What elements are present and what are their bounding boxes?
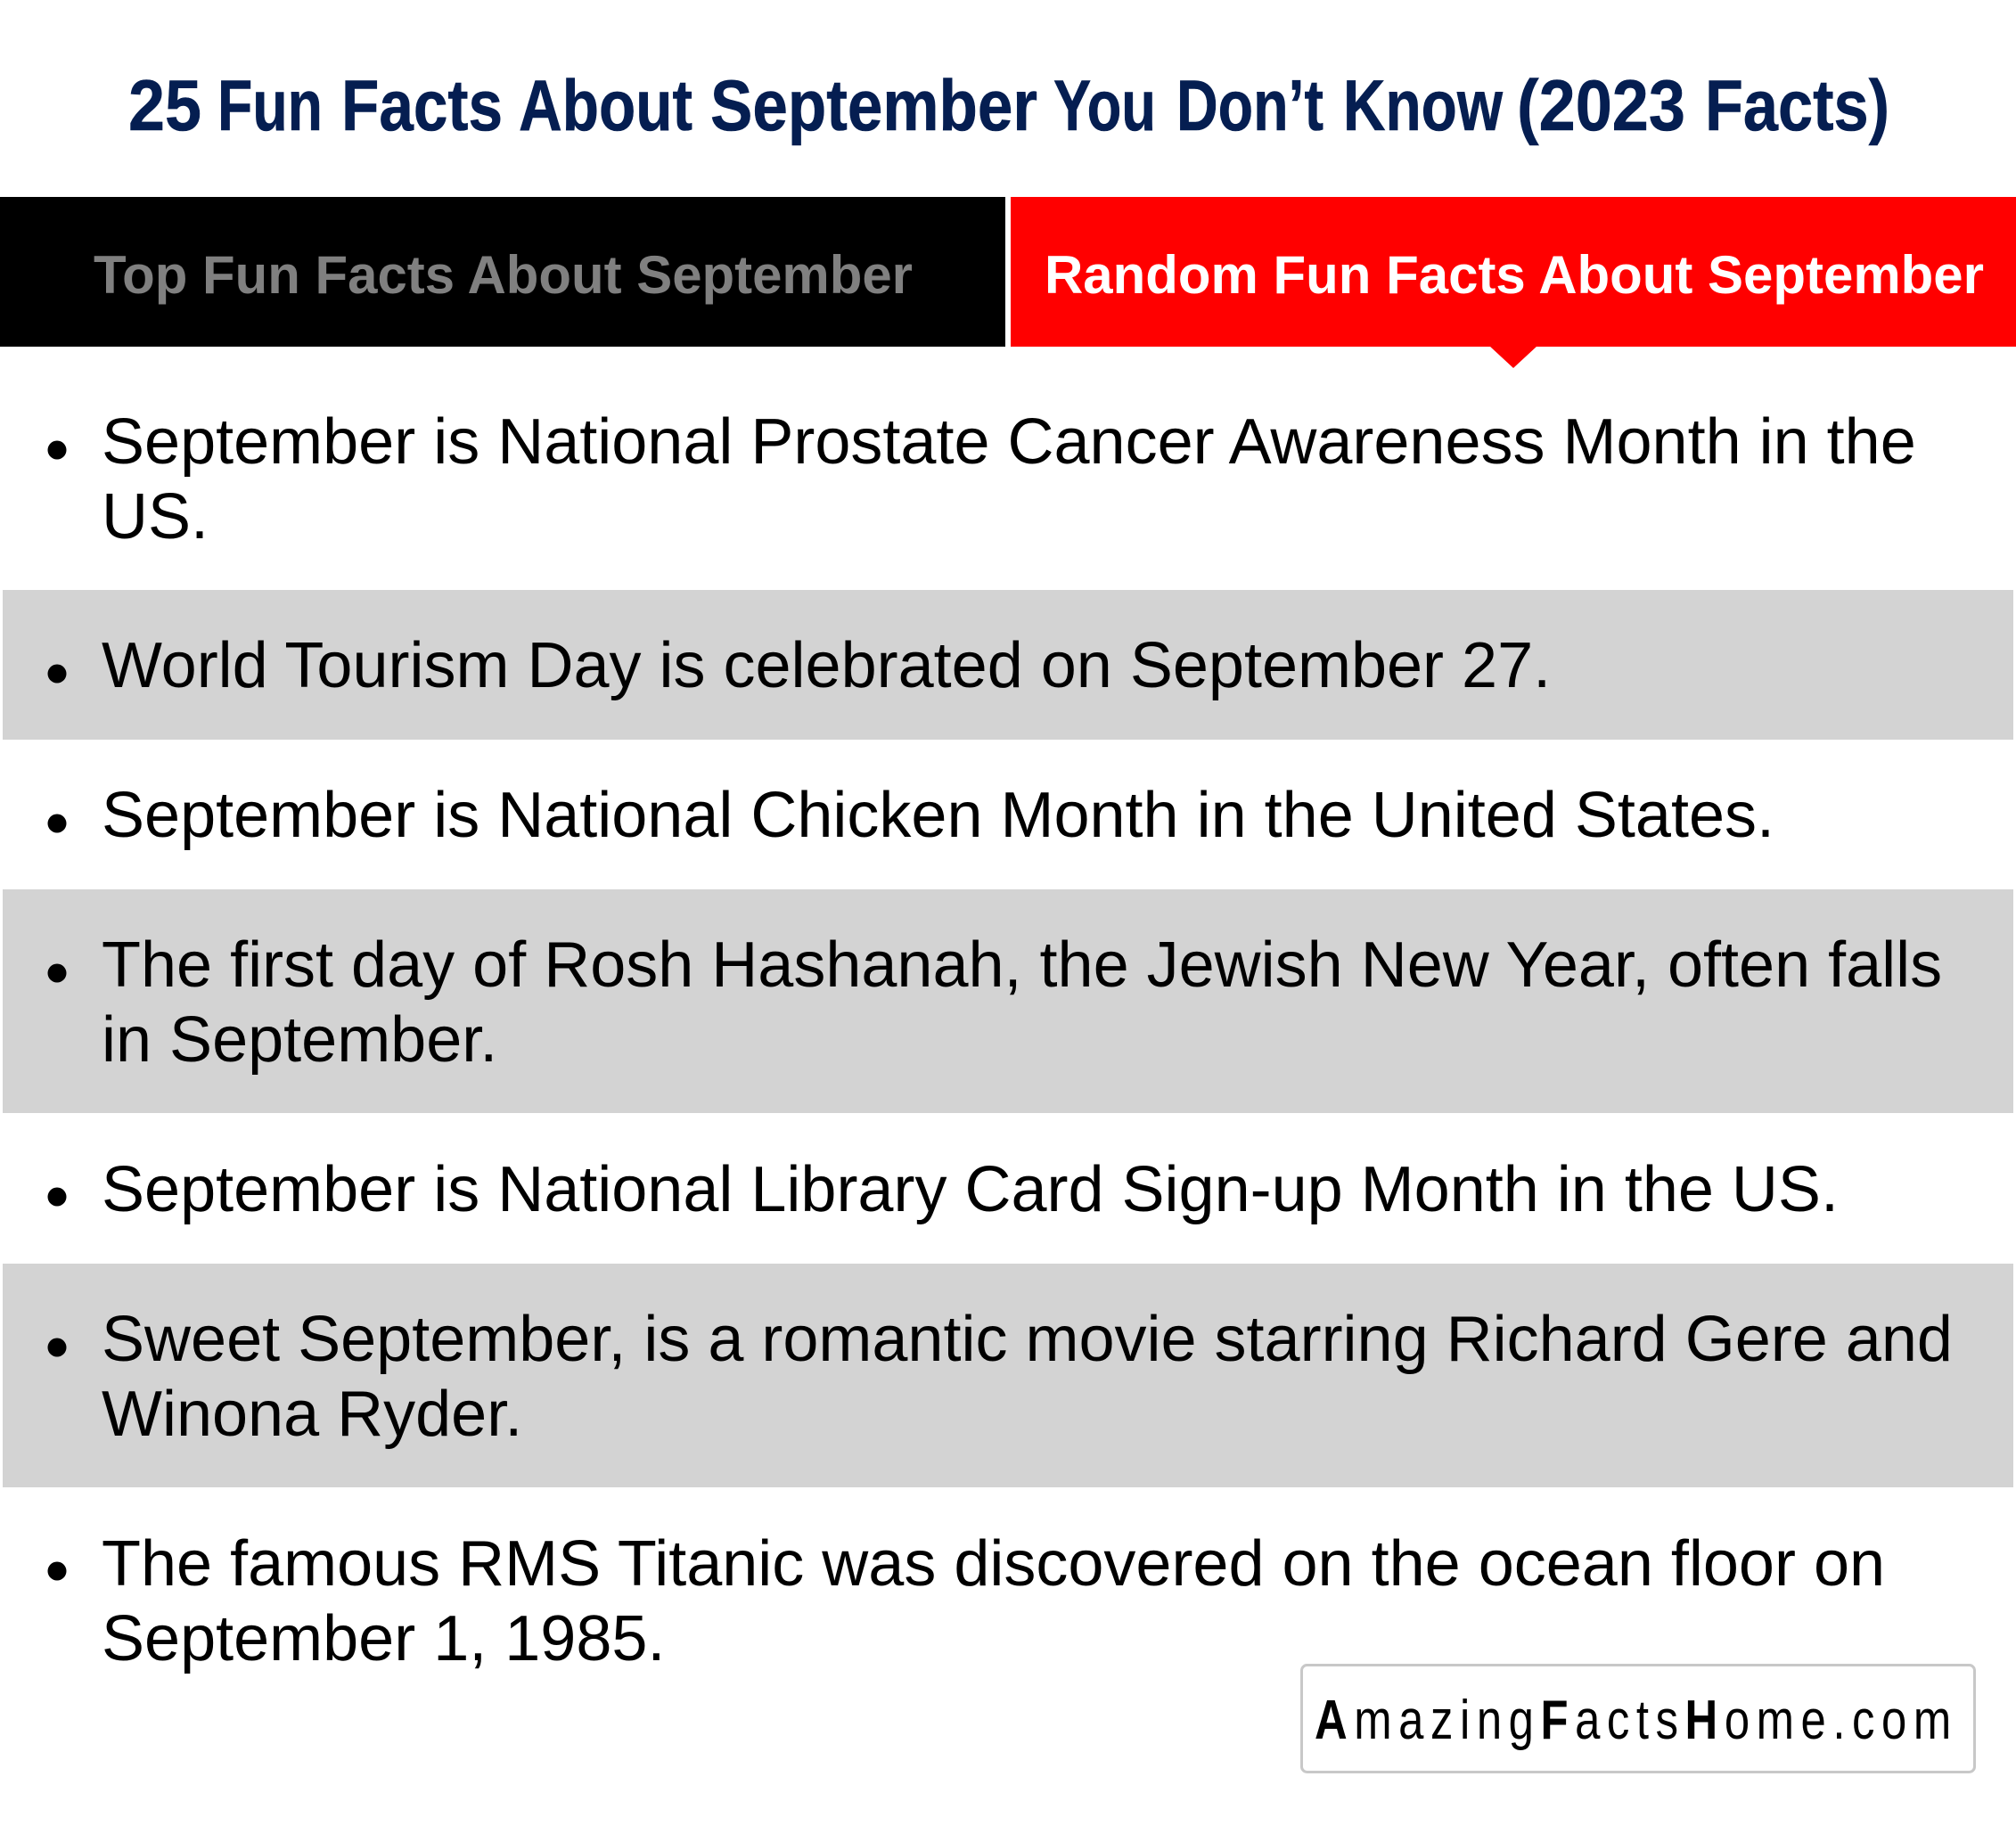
tab: random fun facts (active)	[1011, 197, 2016, 368]
title: 25	[128, 66, 201, 146]
fact 1: US.	[102, 481, 209, 553]
title: (2023	[1517, 66, 1685, 146]
tab: top fun facts	[0, 197, 1005, 347]
tab: random fun facts (active): Random Fun Facts About September	[1045, 245, 1984, 305]
title: Facts)	[1705, 66, 1889, 146]
title: Know	[1343, 66, 1504, 146]
watermark: AmazingFactsHome.com	[1301, 1665, 1975, 1772]
fact 1	[48, 406, 1916, 553]
title: Fun	[217, 66, 323, 146]
tab: top fun facts: Top Fun Facts About September	[94, 245, 913, 305]
title: About	[519, 66, 692, 146]
fact 4: The first day of Rosh Hashanah, the Jewish New Year, often falls	[102, 929, 1942, 1001]
fact 7: September 1, 1985.	[102, 1603, 665, 1674]
fact 1: September is National Prostate Cancer Awareness Month in the	[102, 406, 1916, 478]
fact 5: September is National Library Card Sign-up Month in the US.	[102, 1154, 1839, 1225]
fact 4	[3, 889, 2013, 1113]
watermark: AmazingFactsHome.com: AmazingFactsHome.com	[1315, 1690, 1951, 1751]
title	[128, 66, 1889, 146]
fact 2: World Tourism Day is celebrated on September 27.	[102, 630, 1551, 701]
fact 7	[48, 1528, 1885, 1674]
fact 6	[3, 1264, 2013, 1487]
fact 6: Winona Ryder.	[102, 1379, 522, 1450]
title: September	[710, 66, 1037, 146]
fact 4: in September.	[102, 1004, 497, 1076]
title: You	[1053, 66, 1156, 146]
title: Don’t	[1176, 66, 1324, 146]
title: Facts	[341, 66, 503, 146]
fact 6: Sweet September, is a romantic movie starring Richard Gere and	[102, 1304, 1953, 1375]
fact 2	[3, 590, 2013, 740]
fact 7: The famous RMS Titanic was discovered on the ocean floor on	[102, 1528, 1885, 1600]
fact 3: September is National Chicken Month in the United States.	[102, 780, 1774, 851]
